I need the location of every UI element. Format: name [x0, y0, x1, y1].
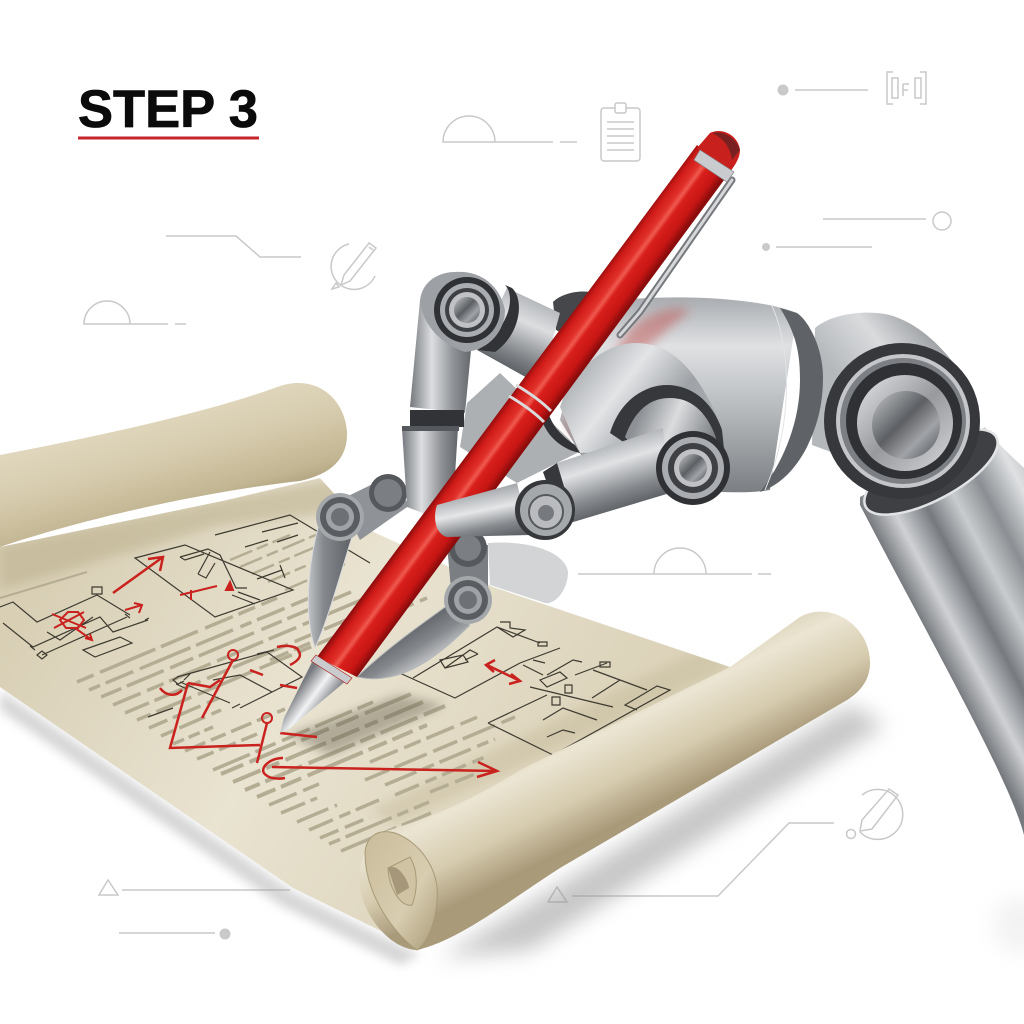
semicircle line center — [578, 548, 771, 574]
large joint — [824, 343, 980, 499]
elbow line left — [166, 236, 301, 257]
upper roll — [0, 383, 347, 547]
wrist cylinder — [610, 385, 726, 475]
shading on sheet next to the rolls — [0, 478, 730, 825]
robot arm — [280, 131, 1024, 835]
knuckle joint — [515, 480, 575, 540]
triangle line bottom left — [99, 880, 290, 895]
forearm — [860, 427, 1024, 835]
pen middle bands — [516, 385, 551, 411]
red markings — [52, 557, 520, 779]
icon: dot line with bracket — [778, 72, 926, 104]
hand knuckle lobe — [543, 343, 717, 453]
pen tip — [280, 660, 347, 733]
lower knuckle behind pen — [460, 373, 577, 483]
icon: pen in circle top — [331, 243, 376, 289]
title: STEP 3: STEP 3 — [78, 80, 258, 139]
background line icons — [84, 72, 951, 940]
hand body — [560, 297, 797, 492]
collar — [543, 463, 574, 528]
text lines on paper — [0, 531, 515, 851]
icon: pen in circle bottom with connector — [572, 789, 903, 896]
pen — [280, 131, 740, 733]
shadows under scroll — [0, 690, 1024, 965]
wrist joint — [656, 431, 730, 505]
vertical segment — [410, 300, 472, 413]
red reflection on body — [565, 308, 690, 440]
line with circle right — [823, 212, 951, 230]
semicircle line left — [84, 301, 186, 324]
front finger — [435, 428, 730, 540]
body dark rim — [760, 308, 823, 492]
pen cap — [697, 131, 740, 172]
shadow of pen on paper — [288, 695, 445, 755]
pen clip — [620, 180, 732, 335]
upper arm segment — [812, 313, 955, 470]
link behind pen — [553, 292, 590, 340]
pen body — [317, 145, 730, 677]
icon: clipboard — [601, 103, 640, 161]
icon: semicircle line top — [443, 116, 577, 142]
grey blob shadow beside the hand — [488, 543, 568, 603]
lower link and claw — [357, 529, 492, 679]
lower roll — [359, 612, 870, 950]
dot with line right — [762, 243, 872, 251]
paper sheet — [0, 478, 730, 950]
roll end spiral — [365, 832, 437, 950]
diagrams on paper — [0, 515, 670, 755]
finger segment one — [557, 428, 670, 523]
pen top ring — [694, 150, 734, 182]
triangle line bottom center — [548, 887, 567, 902]
left claw and links — [308, 474, 410, 648]
top finger — [402, 272, 590, 517]
dot line bottom left — [119, 928, 230, 940]
panel: paper scroll — [0, 383, 870, 950]
finger segment two — [435, 483, 530, 537]
elbow housing — [420, 272, 505, 352]
